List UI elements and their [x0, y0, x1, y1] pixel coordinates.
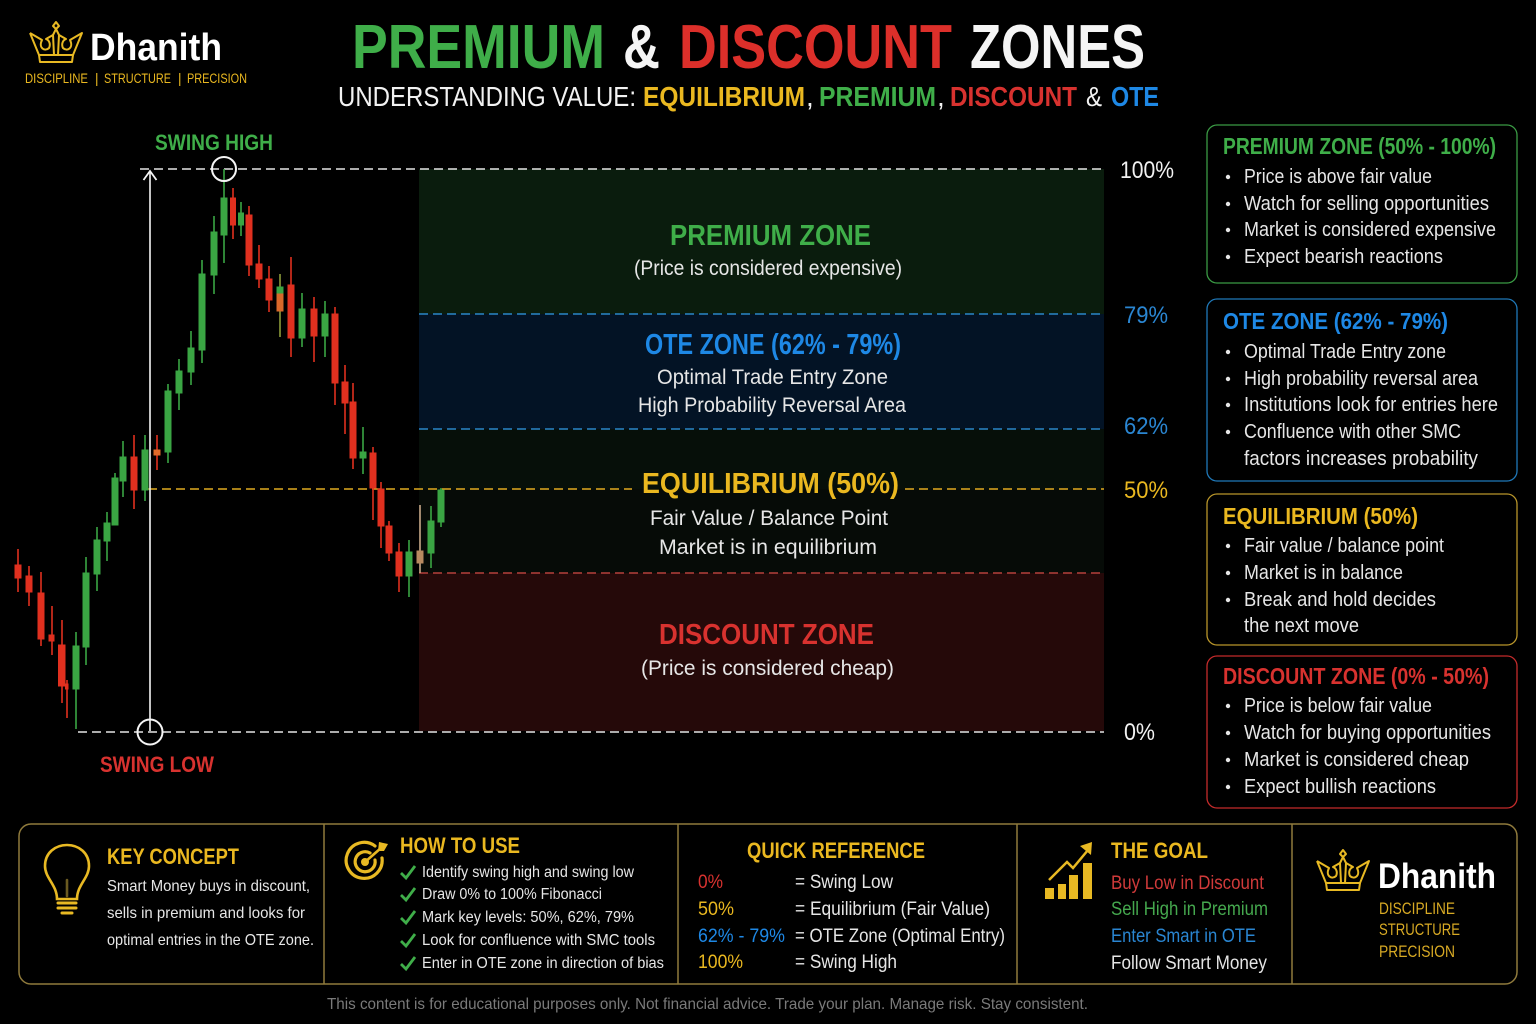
- title: DISCOUNT: [679, 13, 952, 82]
- heading: EQUILIBRIUM (50%): [1223, 503, 1418, 529]
- panel: OTE zone: Confluence with other SMC: [1244, 421, 1461, 443]
- panel: premium zone: Expect bearish reactions: [1244, 246, 1443, 268]
- label: swing low: SWING LOW: [100, 752, 214, 777]
- checklist: Identify swing high and swing low: [422, 864, 635, 881]
- heading: DISCOUNT ZONE (0% - 50%): [1223, 663, 1489, 689]
- logo tagline: STRUCTURE: [1379, 920, 1460, 939]
- footer disclaimer: This content is for educational purposes only. Not financial advice. Trade your plan. Manage risk. Stay consistent.: [327, 996, 1088, 1013]
- panel: discount zone: Expect bullish reactions: [1244, 776, 1436, 798]
- checklist: Draw 0% to 100% Fibonacci: [422, 886, 602, 903]
- body text: sells in premium and looks for: [107, 905, 306, 922]
- heading: OTE ZONE (62% - 79%): [1223, 308, 1448, 334]
- candlestick chart: [15, 169, 444, 729]
- icon: target: [346, 842, 388, 878]
- percent axis labels: 0%: [1124, 719, 1155, 746]
- marker: swing low circle: [138, 720, 162, 744]
- panel: discount zone: [1207, 656, 1517, 808]
- panel: premium zone: Watch for selling opportunities: [1244, 193, 1489, 215]
- table rows: 50%: [698, 899, 734, 920]
- panel: quick reference: [698, 838, 1005, 973]
- subtitle: ,: [937, 81, 945, 112]
- panel: OTE zone: [1207, 299, 1517, 481]
- panel: discount zone: Price is below fair value: [1244, 695, 1432, 717]
- table rows: = OTE Zone (Optimal Entry): [795, 926, 1005, 947]
- body text: [107, 878, 314, 949]
- zone bands chart background: [419, 169, 1104, 731]
- panel: equilibrium: [1207, 494, 1517, 645]
- percent axis labels: 62%: [1124, 413, 1168, 440]
- logo tagline: PRECISION: [187, 71, 247, 86]
- panel: equilibrium: Break and hold decides: [1244, 589, 1436, 611]
- table rows: 0%: [698, 872, 723, 893]
- arrow: swing range: [144, 171, 156, 731]
- zone label: discount: [641, 619, 894, 680]
- band: premium: [419, 169, 1104, 314]
- logo tagline: [1379, 899, 1460, 961]
- icon: crown: [1317, 850, 1369, 890]
- logo tagline: PRECISION: [1379, 942, 1455, 961]
- panel: OTE zone: High probability reversal area: [1244, 368, 1479, 390]
- logo tagline: DISCIPLINE: [25, 71, 88, 86]
- goal lines: Follow Smart Money: [1111, 953, 1267, 974]
- subtitle: [338, 81, 1159, 112]
- heading: QUICK REFERENCE: [747, 838, 925, 863]
- zone label: equilibrium: EQUILIBRIUM (50%): [642, 468, 899, 500]
- logo tagline: |: [95, 71, 99, 86]
- panel: the goal: [1045, 838, 1268, 974]
- panel: OTE zone: Optimal Trade Entry zone: [1244, 341, 1446, 363]
- zone label: equilibrium: Fair Value / Balance Point: [650, 507, 888, 530]
- zone label: OTE: High Probability Reversal Area: [638, 394, 906, 417]
- percent axis labels: 79%: [1124, 302, 1168, 329]
- subtitle: &: [1086, 81, 1102, 112]
- zone label: OTE: [638, 329, 906, 417]
- logo name: Dhanith: [90, 27, 222, 69]
- icon: light bulb: [45, 845, 89, 913]
- panel: premium zone: Market is considered expensive: [1244, 219, 1496, 241]
- table rows: 62% - 79%: [698, 926, 785, 947]
- table rows: [698, 872, 1005, 973]
- icon: growth chart: [1045, 842, 1092, 899]
- goal lines: Sell High in Premium: [1111, 899, 1268, 920]
- zone label: premium: [634, 220, 902, 280]
- panel: premium zone: Price is above fair value: [1244, 166, 1432, 188]
- title: PREMIUM: [352, 13, 605, 82]
- title: [352, 13, 1145, 82]
- subtitle: EQUILIBRIUM: [643, 81, 805, 112]
- table rows: = Equilibrium (Fair Value): [795, 899, 990, 920]
- logo tagline: DISCIPLINE: [1379, 899, 1455, 918]
- goal lines: Buy Low in Discount: [1111, 873, 1265, 894]
- goal lines: [1111, 873, 1268, 974]
- table rows: = Swing High: [795, 952, 897, 973]
- zone label: OTE: OTE ZONE (62% - 79%): [645, 329, 901, 361]
- marker: swing high circle: [212, 157, 236, 181]
- zone label: equilibrium: Market is in equilibrium: [659, 536, 877, 559]
- checklist: Mark key levels: 50%, 62%, 79%: [422, 909, 634, 926]
- band: discount: [419, 573, 1104, 731]
- logo tagline: [25, 71, 247, 86]
- heading: HOW TO USE: [400, 833, 520, 858]
- label: swing high: SWING HIGH: [155, 130, 273, 155]
- subtitle: OTE: [1111, 81, 1159, 112]
- band: OTE: [419, 314, 1104, 429]
- heading: KEY CONCEPT: [107, 844, 239, 869]
- panel: discount zone: Watch for buying opportunities: [1244, 722, 1491, 744]
- subtitle: DISCOUNT: [950, 81, 1077, 112]
- band: equilibrium upper: [419, 429, 1104, 489]
- panel: key concept: [45, 844, 314, 949]
- table rows: 100%: [698, 952, 743, 973]
- panel: premium zone: [1207, 125, 1517, 283]
- logo: top left: [25, 22, 247, 86]
- percent axis labels: 100%: [1120, 157, 1174, 184]
- zone label: premium: (Price is considered expensive): [634, 257, 902, 280]
- panel: OTE zone: Institutions look for entries here: [1244, 394, 1498, 416]
- checklist: Look for confluence with SMC tools: [422, 932, 655, 949]
- heading: THE GOAL: [1111, 838, 1208, 863]
- logo: bottom right: [1317, 850, 1496, 961]
- zone label: premium: PREMIUM ZONE: [670, 220, 871, 252]
- zone label: discount: DISCOUNT ZONE: [659, 619, 874, 651]
- title: ZONES: [970, 13, 1145, 82]
- logo tagline: STRUCTURE: [104, 71, 171, 86]
- body text: Smart Money buys in discount,: [107, 878, 310, 895]
- title: &: [623, 13, 660, 82]
- panel: equilibrium: Fair value / balance point: [1244, 535, 1444, 557]
- zone label: OTE: Optimal Trade Entry Zone: [657, 366, 888, 389]
- body text: optimal entries in the OTE zone.: [107, 932, 314, 949]
- level lines: [78, 169, 1104, 732]
- subtitle: ,: [806, 81, 814, 112]
- panel: equilibrium: Market is in balance: [1244, 562, 1403, 584]
- panel: equilibrium: the next move: [1244, 615, 1359, 637]
- table rows: = Swing Low: [795, 872, 893, 893]
- band: equilibrium lower: [419, 489, 1104, 573]
- panel: discount zone: Market is considered cheap: [1244, 749, 1469, 771]
- goal lines: Enter Smart in OTE: [1111, 926, 1256, 947]
- icon: crown: [30, 22, 82, 62]
- panel: how to use: [346, 833, 664, 972]
- panel: bottom strip frame: [19, 824, 1517, 984]
- percent axis labels: 50%: [1124, 477, 1168, 504]
- panel: OTE zone: factors increases probability: [1244, 448, 1478, 470]
- subtitle: PREMIUM: [819, 81, 936, 112]
- checklist: Enter in OTE zone in direction of bias: [422, 955, 664, 972]
- logo tagline: |: [178, 71, 182, 86]
- percent axis labels: [1120, 157, 1174, 746]
- zone label: discount: (Price is considered cheap): [641, 657, 894, 680]
- zone label: equilibrium: [642, 468, 899, 559]
- checklist: [401, 864, 664, 972]
- logo name: Dhanith: [1378, 857, 1496, 896]
- subtitle: UNDERSTANDING VALUE:: [338, 81, 636, 112]
